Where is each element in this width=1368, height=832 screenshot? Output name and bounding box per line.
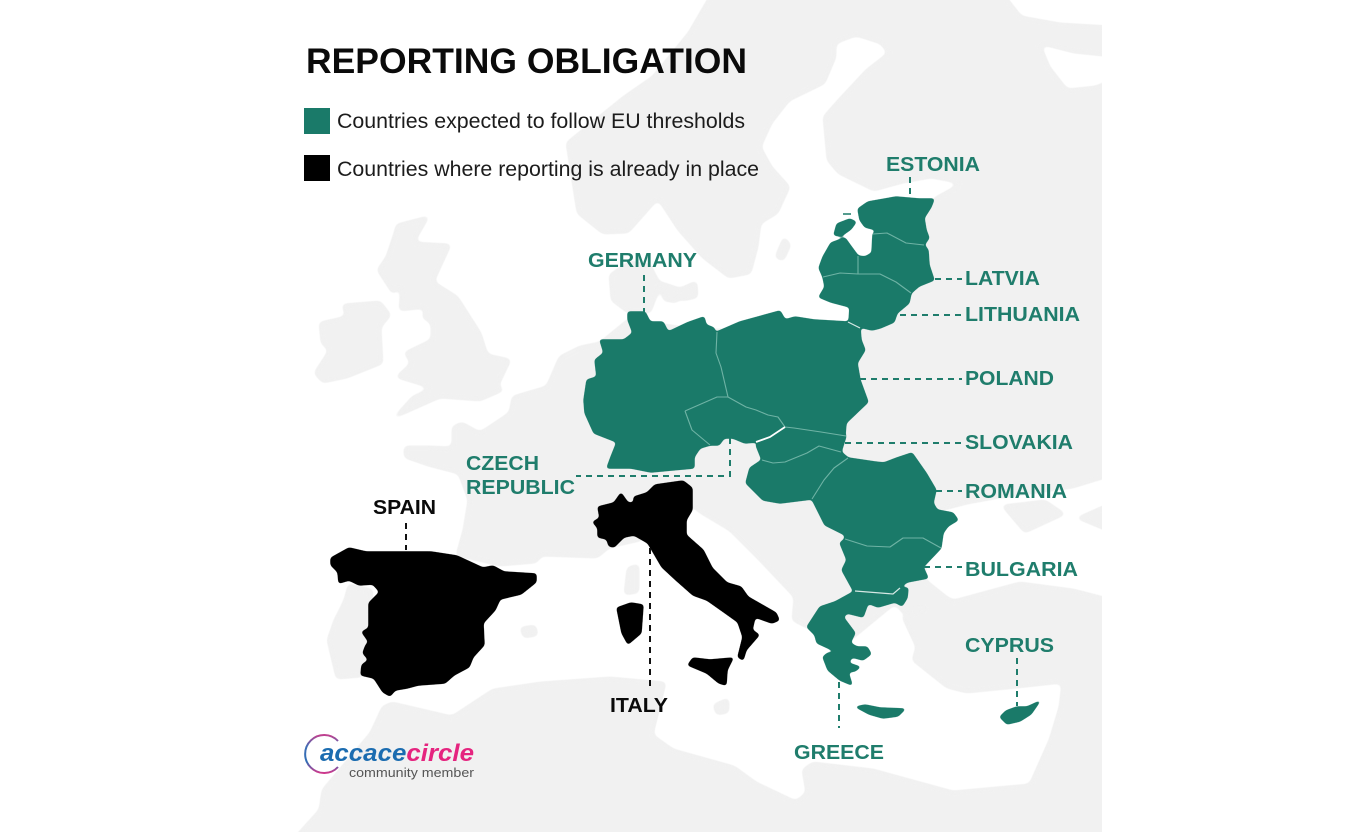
country: Romania bbox=[812, 453, 958, 547]
title: REPORTING OBLIGATION bbox=[306, 42, 747, 81]
label: Cyprus bbox=[965, 635, 1054, 706]
country: Germany bbox=[584, 312, 728, 472]
map: countries with reporting in place bbox=[331, 481, 779, 696]
label: Germany: GERMANY bbox=[588, 250, 698, 272]
label: Germany bbox=[588, 250, 698, 312]
legend text: already in place: Countries where reporting is already in place bbox=[337, 158, 759, 181]
label: Czech Republic: REPUBLIC bbox=[466, 477, 575, 499]
island: Crete bbox=[856, 705, 905, 718]
label: Lithuania: LITHUANIA bbox=[965, 304, 1080, 326]
logo: accace circle community member bbox=[305, 735, 475, 780]
legend swatch: black bbox=[304, 155, 330, 181]
background: Great Britain bbox=[378, 217, 510, 417]
background: Malta bbox=[714, 699, 728, 714]
background: Danish island east bbox=[678, 282, 697, 300]
background: Danish island bbox=[662, 283, 677, 302]
background: Denmark bbox=[610, 262, 660, 312]
country: Bulgaria bbox=[840, 538, 941, 594]
label: Latvia bbox=[935, 268, 1040, 290]
map: countries following EU thresholds bbox=[584, 197, 1040, 724]
legend text: EU thresholds: Countries expected to follow EU thresholds bbox=[337, 110, 745, 133]
label: Estonia: ESTONIA bbox=[886, 154, 980, 176]
label: Spain: SPAIN bbox=[373, 497, 436, 519]
infographic canvas bbox=[298, 0, 1102, 832]
label: Czech Republic bbox=[466, 438, 730, 499]
label: Cyprus: CYPRUS bbox=[965, 635, 1054, 657]
country: Lithuania bbox=[819, 273, 911, 330]
background: mainland Europe and Scandinavia bbox=[405, 0, 1112, 640]
label: Slovakia: SLOVAKIA bbox=[965, 432, 1073, 454]
logo wordmark: accace circle bbox=[320, 740, 474, 767]
country borders bbox=[685, 214, 941, 594]
label: Spain bbox=[373, 497, 436, 550]
country: Cyprus bbox=[1000, 701, 1040, 724]
logo ring bbox=[305, 735, 338, 773]
label: Italy: ITALY bbox=[610, 695, 669, 717]
background: Thrace bbox=[905, 586, 952, 608]
island: Sardinia bbox=[617, 603, 643, 644]
label: Greece: GREECE bbox=[794, 742, 884, 764]
island: Sicily bbox=[688, 658, 733, 685]
legend swatch: teal bbox=[304, 108, 330, 134]
island: Saaremaa bbox=[834, 219, 856, 236]
background: Portugal bbox=[328, 585, 372, 678]
label: Greece bbox=[794, 682, 884, 764]
legend bbox=[304, 108, 759, 181]
background: Crimea bbox=[1003, 501, 1064, 532]
background: Ireland bbox=[315, 302, 390, 382]
background: Caucasus bbox=[1080, 506, 1102, 529]
country: Latvia bbox=[819, 233, 934, 293]
background: Gotland bbox=[776, 238, 790, 260]
country: Greece bbox=[807, 588, 908, 685]
logo tagline: community member bbox=[349, 765, 475, 780]
label: Czech Republic: CZECH bbox=[466, 453, 539, 475]
background: Africa and Levant bbox=[291, 660, 1112, 832]
country: Estonia bbox=[858, 197, 934, 245]
label: Estonia bbox=[886, 154, 980, 197]
background: Corsica bbox=[625, 565, 638, 594]
country: Spain bbox=[331, 548, 536, 696]
background map of Europe bbox=[291, 0, 1112, 832]
label: Latvia: LATVIA bbox=[965, 268, 1040, 290]
background: Mallorca bbox=[521, 626, 537, 637]
country: Czech Republic bbox=[685, 397, 785, 445]
country: Italy bbox=[593, 481, 779, 660]
label: Bulgaria: BULGARIA bbox=[965, 559, 1078, 581]
country: Slovakia bbox=[756, 427, 846, 463]
label: Romania: ROMANIA bbox=[965, 481, 1067, 503]
label: Poland: POLAND bbox=[965, 368, 1054, 390]
background: Turkey bbox=[903, 583, 1112, 692]
country: Poland bbox=[716, 311, 868, 435]
country: Hungary bbox=[746, 446, 848, 503]
